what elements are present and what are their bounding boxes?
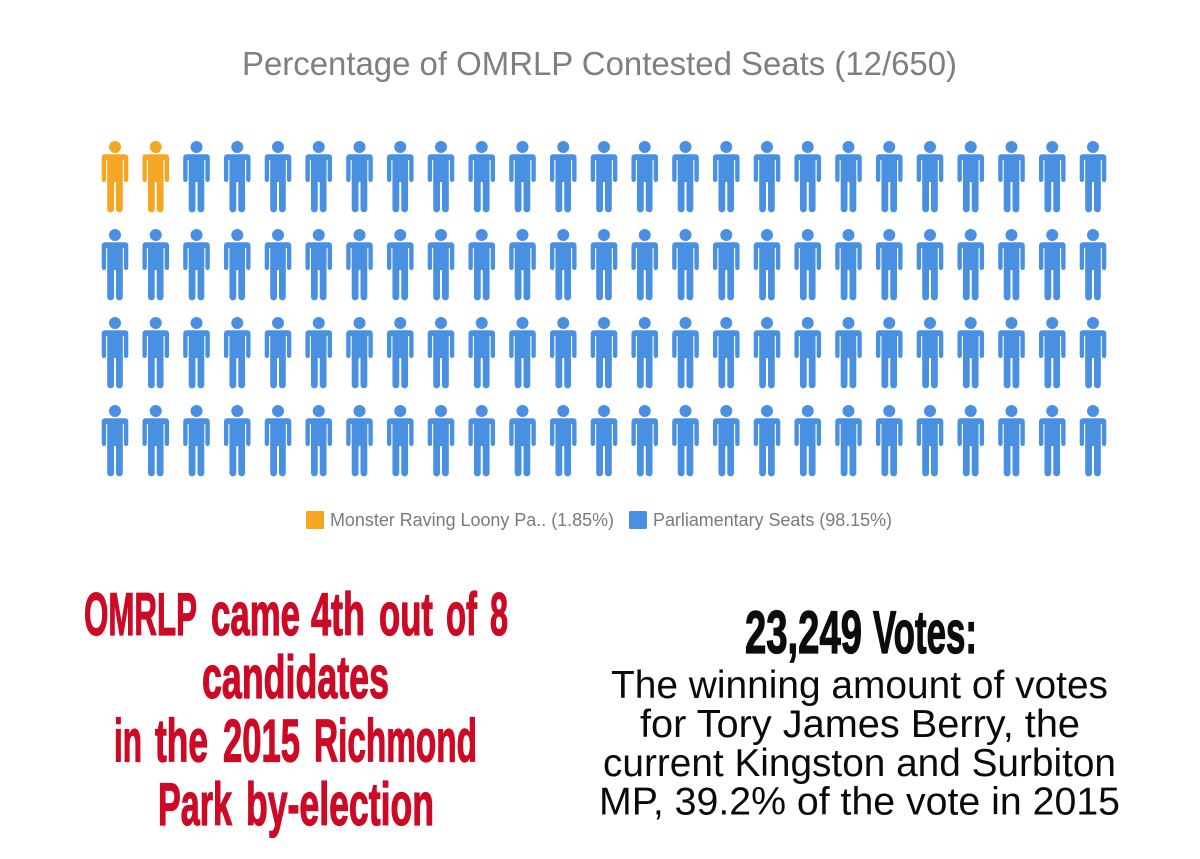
red heading: by-election result: OMRLP [84, 581, 197, 648]
red heading: by-election result: Park [158, 771, 232, 838]
pictogram chart: seats [102, 141, 1106, 476]
red heading: by-election result [84, 581, 508, 838]
red heading: by-election result: by-election [246, 771, 434, 838]
text block: winning votes description: The winning amount of votes [611, 664, 1108, 707]
legend swatch: blue [629, 511, 647, 529]
red heading: by-election result: of [446, 581, 478, 648]
red heading: by-election result: Richmond [314, 708, 477, 774]
red heading: by-election result: 8 [490, 581, 508, 648]
row 1 of figures [102, 141, 1106, 212]
red heading: by-election result: 2015 [223, 708, 300, 774]
legend [306, 509, 892, 530]
row 4 of figures [102, 405, 1106, 476]
text block: winning votes description: current Kingston and Surbiton [603, 742, 1116, 785]
red heading: by-election result: out [379, 581, 433, 648]
text block: winning votes description [599, 664, 1120, 824]
red heading: by-election result: in [114, 708, 142, 774]
red heading: by-election result: came [211, 581, 300, 648]
legend swatch: orange [306, 511, 324, 529]
row 2 of figures [102, 229, 1106, 300]
black heading: vote count: Votes: [873, 599, 977, 666]
red heading: by-election result: 4th [311, 581, 365, 648]
legend label: Parliamentary Seats: Parliamentary Seats (98.15%) [653, 509, 892, 530]
row 3 of figures [102, 317, 1106, 388]
red heading: by-election result: the [155, 708, 208, 774]
title: Percentage of OMRLP Contested Seats (12/650) [242, 45, 957, 82]
legend label: Monster Raving Loony Party: Monster Raving Loony Pa.. (1.85%) [330, 509, 614, 530]
red heading: by-election result: candidates [202, 644, 389, 711]
text block: winning votes description: for Tory James Berry, the [640, 703, 1080, 746]
text block: winning votes description: MP, 39.2% of the vote in 2015 [599, 780, 1120, 824]
black heading: vote count: 23,249 [745, 599, 862, 666]
